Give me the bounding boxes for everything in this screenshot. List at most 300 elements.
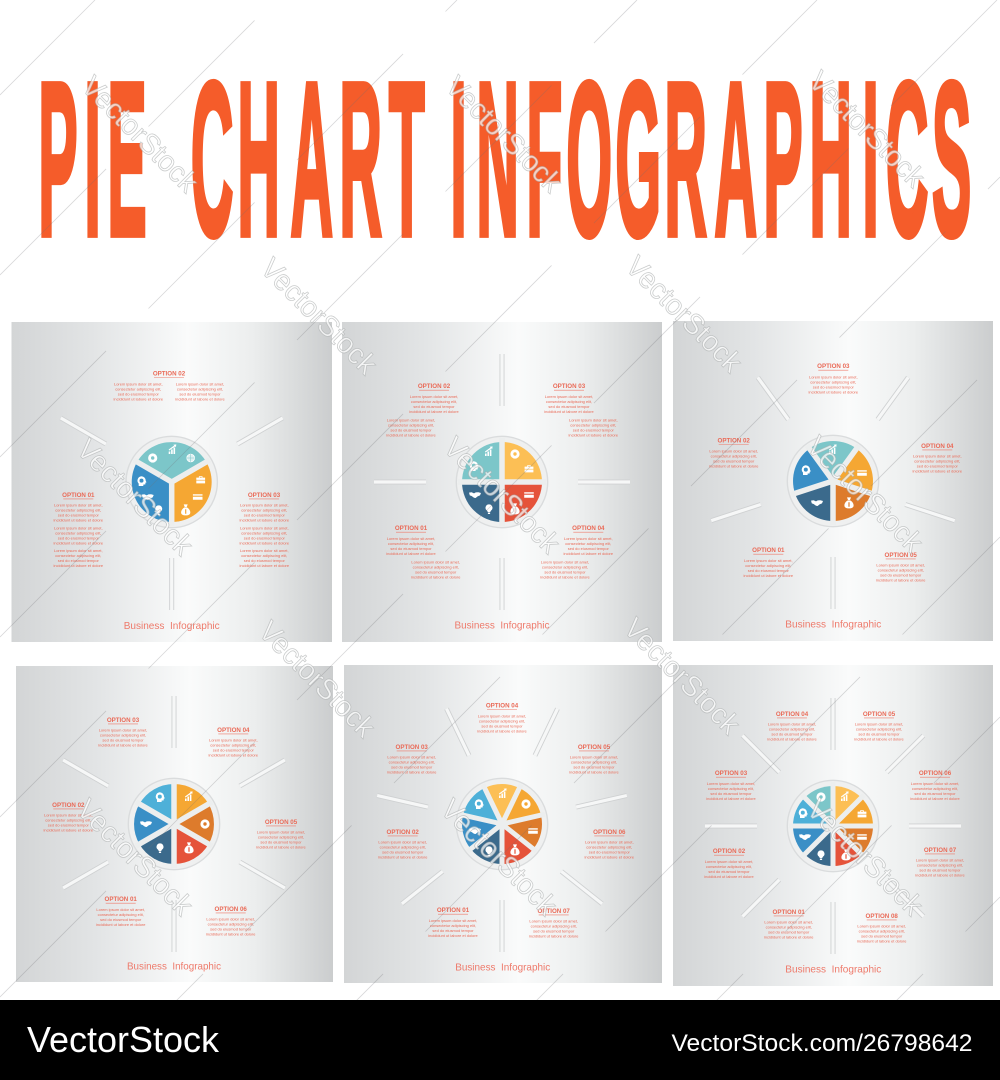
option 05: OPTION 05: [885, 552, 917, 559]
icon: briefcase: [525, 465, 533, 472]
option 06: Lorem ipsum dolor sit amet,: [585, 840, 634, 845]
option 02: Lorem ipsum dolor sit amet,: [44, 813, 93, 818]
option 02: OPTION 02: [718, 438, 750, 444]
option 02: sed do eiusmod tempor: [179, 391, 221, 396]
option 06: OPTION 06: [593, 829, 626, 836]
icon: bulb: [486, 846, 492, 856]
option 06: [206, 906, 256, 937]
option 01: incididunt ut labore et dolore: [386, 551, 437, 556]
caption: Business Infographic: [785, 618, 881, 630]
option 02: Lorem ipsum dolor sit amet,: [705, 859, 753, 864]
icon: head: [802, 465, 811, 475]
option 04: sed do eiusmod tempor: [544, 570, 586, 575]
option 03: OPTION 03: [715, 770, 748, 777]
option 02: consectetur adipiscing elit,: [380, 845, 426, 850]
option 02: incididunt ut labore et dolore: [704, 874, 755, 879]
option 02: sed do eiusmod tempor: [382, 850, 424, 855]
option 01: Lorem ipsum dolor sit amet,: [764, 920, 813, 925]
option 01: OPTION 01: [395, 525, 428, 532]
option 02: sed do eiusmod tempor: [390, 427, 432, 432]
option 02: consectetur adipiscing elit,: [115, 386, 161, 391]
option 01: [428, 907, 479, 938]
option 03: Lorem ipsum dolor sit amet,: [240, 503, 289, 508]
option 03: sed do eiusmod tempor: [244, 558, 286, 563]
option 05: sed do eiusmod tempor: [858, 732, 900, 737]
icon: card: [528, 828, 538, 834]
option 01: [764, 909, 814, 940]
spokes: [711, 377, 955, 609]
option 01: consectetur adipiscing elit,: [388, 541, 434, 546]
option 06: consectetur adipiscing elit,: [586, 845, 632, 850]
option 04: OPTION 04: [486, 702, 519, 710]
option 08: Lorem ipsum dolor sit amet,: [857, 924, 906, 929]
option 05: Lorem ipsum dolor sit amet,: [876, 563, 925, 568]
option 05: [256, 819, 307, 850]
option 01: consectetur adipiscing elit,: [766, 925, 812, 930]
option 03: incididunt ut labore et dolore: [98, 743, 149, 748]
option 03: sed do eiusmod tempor: [548, 404, 590, 409]
option 04: OPTION 04: [776, 711, 809, 718]
option 06: [910, 770, 961, 801]
option 03: consectetur adipiscing elit,: [241, 530, 287, 535]
option 03: Lorem ipsum dolor sit amet,: [707, 781, 755, 786]
option 03: OPTION 03: [817, 363, 850, 370]
option 02: OPTION 02: [713, 848, 746, 855]
option 03: consectetur adipiscing elit,: [389, 759, 435, 764]
option 04: consectetur adipiscing elit,: [542, 565, 588, 570]
watermarks: [70, 65, 931, 922]
caption: Business Infographic: [785, 964, 881, 976]
option 01: incididunt ut labore et dolore: [54, 563, 104, 568]
icon: gear: [200, 819, 210, 829]
watermarks: VectorStock: [439, 70, 568, 199]
footer url: VectorStock.com/26798642: [672, 1030, 972, 1057]
option 08: consectetur adipiscing elit,: [859, 929, 905, 934]
panel: six-segment pie: [16, 666, 333, 982]
pie chart: [456, 436, 548, 528]
option 03: sed do eiusmod tempor: [573, 427, 615, 432]
watermarks: VectorStock: [619, 250, 748, 379]
icon: bulb: [157, 843, 163, 853]
panel: four-segment pie: [342, 322, 662, 642]
option 07: Lorem ipsum dolor sit amet,: [916, 858, 964, 863]
option 03: consectetur adipiscing elit,: [708, 786, 754, 791]
option 03: consectetur adipiscing elit,: [241, 553, 287, 558]
option 04: OPTION 04: [921, 443, 954, 450]
option 01: incididunt ut labore et dolore: [411, 575, 461, 580]
option 07: OPTION 07: [924, 847, 957, 854]
option 03: incididunt ut labore et dolore: [544, 409, 595, 414]
option 07: sed do eiusmod tempor: [533, 929, 575, 934]
option 02: OPTION 02: [52, 802, 85, 809]
option 06: sed do eiusmod tempor: [210, 927, 252, 932]
option 01: Lorem ipsum dolor sit amet,: [411, 560, 460, 565]
option 04: [913, 443, 963, 474]
watermarks: VectorStock: [802, 65, 931, 194]
option 05: Lorem ipsum dolor sit amet,: [570, 754, 618, 759]
icon: handshake: [799, 834, 811, 840]
option 04: Lorem ipsum dolor sit amet,: [913, 454, 962, 459]
option 04: incididunt ut labore et dolore: [209, 753, 259, 758]
icon: gear: [510, 449, 520, 459]
panel: five-segment pie: [673, 321, 993, 641]
option 07: Lorem ipsum dolor sit amet,: [529, 919, 578, 924]
option 02: [704, 848, 755, 879]
icon: money bag: [844, 497, 854, 508]
option 01: Lorem ipsum dolor sit amet,: [387, 536, 435, 541]
option 01: Lorem ipsum dolor sit amet,: [429, 918, 477, 923]
option 01: Lorem ipsum dolor sit amet,: [744, 558, 793, 563]
icon: money bag: [181, 504, 190, 515]
option 02: [114, 370, 226, 401]
option 01: Lorem ipsum dolor sit amet,: [54, 525, 103, 530]
option 05: OPTION 05: [578, 744, 611, 751]
option 01: OPTION 01: [437, 907, 470, 914]
option 03: sed do eiusmod tempor: [710, 791, 752, 796]
icon: gear: [148, 453, 157, 463]
option 01: consectetur adipiscing elit,: [745, 563, 791, 568]
icon: head: [137, 476, 146, 486]
watermarks: VectorStock: [75, 70, 204, 199]
icon: head: [475, 799, 484, 809]
option 04: Lorem ipsum dolor sit amet,: [478, 713, 526, 718]
icon: card: [524, 492, 534, 498]
option 03: incididunt ut labore et dolore: [387, 769, 437, 774]
option 04: sed do eiusmod tempor: [568, 546, 610, 551]
option 07: incididunt ut labore et dolore: [529, 934, 579, 939]
option 06: OPTION 06: [215, 906, 247, 913]
option 03: [544, 383, 619, 437]
icon: card: [857, 470, 867, 476]
option 05: Lorem ipsum dolor sit amet,: [855, 722, 903, 727]
option 03: OPTION 03: [396, 744, 428, 751]
option 07: incididunt ut labore et dolore: [915, 873, 966, 878]
option 02: [44, 802, 94, 833]
watermarks: VectorStock: [800, 430, 929, 559]
option 04: sed do eiusmod tempor: [213, 748, 255, 753]
option 05: incididunt ut labore et dolore: [569, 769, 620, 774]
option 04: OPTION 04: [572, 525, 605, 532]
icon: bulb: [818, 850, 824, 860]
icon: briefcase: [196, 476, 205, 483]
option 01: [386, 525, 461, 580]
icon: handshake: [469, 492, 481, 498]
option 02: incididunt ut labore et dolore: [709, 464, 759, 469]
option 03: incididunt ut labore et dolore: [569, 432, 619, 437]
option 01: OPTION 01: [773, 909, 805, 916]
option 08: [857, 913, 907, 944]
option 06: Lorem ipsum dolor sit amet,: [911, 781, 959, 786]
option 02: consectetur adipiscing elit,: [388, 422, 434, 427]
option 05: [569, 744, 620, 774]
option 02: OPTION 02: [418, 383, 451, 390]
icon: handshake: [142, 494, 154, 500]
option 02: OPTION 02: [387, 829, 419, 836]
option 02: Lorem ipsum dolor sit amet,: [114, 381, 163, 386]
option 04: incididunt ut labore et dolore: [564, 551, 614, 556]
option 01: incididunt ut labore et dolore: [54, 540, 104, 545]
option 03: Lorem ipsum dolor sit amet,: [809, 374, 858, 379]
option 01: [54, 492, 104, 568]
option 03: [98, 717, 149, 748]
option 05: OPTION 05: [265, 819, 298, 826]
icon: chart: [485, 446, 493, 456]
caption: Business Infographic: [455, 962, 550, 974]
option 06: incididunt ut labore et dolore: [585, 855, 635, 860]
option 02: incididunt ut labore et dolore: [175, 396, 226, 401]
option 02: [709, 438, 759, 469]
option 04: incididunt ut labore et dolore: [913, 469, 963, 474]
option 02: incididunt ut labore et dolore: [386, 432, 437, 437]
option 04: consectetur adipiscing elit,: [479, 718, 525, 723]
option 08: sed do eiusmod tempor: [861, 934, 903, 939]
option 01: consectetur adipiscing elit,: [55, 508, 101, 513]
option 06: OPTION 06: [919, 770, 952, 777]
icon: head: [470, 461, 479, 471]
watermarks: VectorStock: [617, 612, 746, 741]
option 03: OPTION 03: [553, 383, 586, 390]
option 06: [585, 829, 635, 860]
caption: Business Infographic: [127, 960, 221, 972]
option 07: consectetur adipiscing elit,: [531, 924, 577, 929]
option 02: consectetur adipiscing elit,: [45, 818, 91, 823]
option 04: consectetur adipiscing elit,: [914, 459, 960, 464]
option 01: OPTION 01: [105, 896, 137, 903]
icon: bulb: [155, 505, 162, 515]
option 02: consectetur adipiscing elit,: [411, 399, 457, 404]
option 01: Lorem ipsum dolor sit amet,: [54, 548, 103, 553]
pie chart: [787, 435, 879, 527]
option 02: Lorem ipsum dolor sit amet,: [378, 840, 427, 845]
option 04: sed do eiusmod tempor: [771, 732, 813, 737]
option 02: consectetur adipiscing elit,: [711, 454, 757, 459]
option 05: consectetur adipiscing elit,: [258, 835, 304, 840]
panel: seven-segment pie: [344, 665, 662, 983]
option 04: Lorem ipsum dolor sit amet,: [209, 738, 258, 743]
option 05: incididunt ut labore et dolore: [256, 845, 307, 850]
option 06: incididunt ut labore et dolore: [910, 796, 961, 801]
option 02: [386, 383, 460, 437]
option 01: [744, 547, 794, 578]
option 02: incididunt ut labore et dolore: [409, 409, 460, 414]
option 05: consectetur adipiscing elit,: [571, 759, 617, 764]
option 04: [540, 525, 614, 580]
footer logo: VectorStock: [27, 1019, 220, 1060]
option 04: consectetur adipiscing elit,: [210, 743, 256, 748]
pie chart: [456, 778, 548, 870]
icon: card: [857, 834, 867, 840]
spokes: [705, 698, 961, 954]
option 03: sed do eiusmod tempor: [244, 513, 286, 518]
icon: head: [156, 792, 165, 802]
option 07: consectetur adipiscing elit,: [917, 863, 963, 868]
option 05: OPTION 05: [863, 711, 896, 718]
option 04: incididunt ut labore et dolore: [540, 575, 591, 580]
option 02: sed do eiusmod tempor: [118, 391, 160, 396]
option 03: Lorem ipsum dolor sit amet,: [240, 548, 289, 553]
option 01: consectetur adipiscing elit,: [430, 923, 476, 928]
option 04: [767, 711, 818, 742]
panel: eight-segment pie: [673, 665, 993, 986]
option 03: [387, 744, 437, 774]
option 03: Lorem ipsum dolor sit amet,: [387, 754, 436, 759]
icon: chart: [169, 444, 176, 454]
option 01: sed do eiusmod tempor: [390, 546, 432, 551]
option 01: incididunt ut labore et dolore: [764, 935, 814, 940]
option 04: Lorem ipsum dolor sit amet,: [564, 536, 613, 541]
option 04: incididunt ut labore et dolore: [477, 728, 528, 733]
option 02: [378, 829, 428, 860]
option 03: [240, 492, 290, 568]
option 07: OPTION 07: [538, 908, 570, 915]
option 07: [529, 908, 579, 939]
option 02: sed do eiusmod tempor: [413, 404, 455, 409]
option 03: Lorem ipsum dolor sit amet,: [545, 394, 593, 399]
spokes: [377, 709, 627, 952]
option 03: incididunt ut labore et dolore: [240, 540, 290, 545]
option 03: Lorem ipsum dolor sit amet,: [569, 417, 618, 422]
icon: briefcase: [858, 810, 866, 817]
title word: PIE: PIE: [38, 37, 147, 281]
spokes: [61, 418, 283, 610]
option 04: Lorem ipsum dolor sit amet,: [541, 560, 589, 565]
option 03: consectetur adipiscing elit,: [570, 422, 616, 427]
option 03: consectetur adipiscing elit,: [546, 399, 592, 404]
option 06: Lorem ipsum dolor sit amet,: [206, 917, 255, 922]
icon: handshake: [811, 500, 823, 506]
option 01: OPTION 01: [62, 492, 95, 499]
option 04: Lorem ipsum dolor sit amet,: [768, 722, 816, 727]
option 05: sed do eiusmod tempor: [260, 840, 302, 845]
option 01: sed do eiusmod tempor: [100, 917, 142, 922]
option 01: consectetur adipiscing elit,: [98, 912, 144, 917]
title word: INFOGRAPHICS: INFOGRAPHICS: [450, 37, 971, 281]
icon: globe: [187, 454, 195, 462]
icon: head: [799, 808, 808, 818]
watermarks: VectorStock: [70, 793, 199, 922]
option 01: incididunt ut labore et dolore: [54, 518, 104, 523]
option 02: sed do eiusmod tempor: [48, 823, 90, 828]
option 07: sed do eiusmod tempor: [919, 868, 961, 873]
option 01: sed do eiusmod tempor: [58, 558, 100, 563]
pie chart: [787, 780, 879, 872]
icon: handshake: [469, 828, 481, 834]
spokes: [374, 354, 630, 610]
option 04: sed do eiusmod tempor: [481, 723, 523, 728]
option 05: incididunt ut labore et dolore: [876, 578, 926, 583]
option 05: [876, 552, 926, 583]
icon: gear: [521, 799, 531, 809]
option 03: sed do eiusmod tempor: [813, 384, 855, 389]
icon: money bag: [184, 842, 194, 853]
pie chart: [128, 778, 220, 870]
option 02: incididunt ut labore et dolore: [44, 828, 94, 833]
option 02: sed do eiusmod tempor: [713, 459, 755, 464]
option 02: consectetur adipiscing elit,: [177, 386, 223, 391]
option 03: Lorem ipsum dolor sit amet,: [99, 728, 147, 733]
option 02: Lorem ipsum dolor sit amet,: [387, 417, 435, 422]
icon: card: [193, 494, 202, 500]
option 01: [96, 896, 146, 927]
watermarks: VectorStock: [434, 793, 563, 922]
option 03: OPTION 03: [107, 717, 140, 724]
option 03: incididunt ut labore et dolore: [809, 389, 859, 394]
option 06: incididunt ut labore et dolore: [206, 932, 256, 937]
option 01: incididunt ut labore et dolore: [744, 573, 794, 578]
panel: three-segment pie: [12, 322, 332, 642]
title: [38, 37, 971, 281]
option 01: OPTION 01: [752, 547, 785, 554]
option 04: consectetur adipiscing elit,: [769, 727, 815, 732]
option 04: consectetur adipiscing elit,: [565, 541, 611, 546]
icon: money bag: [841, 849, 851, 860]
caption: Business Infographic: [454, 620, 550, 632]
icon: gear: [816, 792, 826, 802]
icon: bulb: [486, 504, 492, 514]
option 05: consectetur adipiscing elit,: [878, 568, 924, 573]
option 03: incididunt ut labore et dolore: [240, 518, 290, 523]
caption: Business Infographic: [124, 620, 220, 632]
footer bar: [0, 1000, 1000, 1080]
option 03: Lorem ipsum dolor sit amet,: [240, 525, 289, 530]
option 02: Lorem ipsum dolor sit amet,: [709, 449, 758, 454]
icon: handshake: [140, 821, 152, 827]
option 08: incididunt ut labore et dolore: [857, 939, 907, 944]
option 04: [477, 702, 528, 733]
option 01: consectetur adipiscing elit,: [413, 565, 459, 570]
option 04: OPTION 04: [217, 727, 250, 734]
option 06: consectetur adipiscing elit,: [912, 786, 958, 791]
option 01: Lorem ipsum dolor sit amet,: [54, 503, 103, 508]
option 03: consectetur adipiscing elit,: [810, 379, 856, 384]
option 05: Lorem ipsum dolor sit amet,: [257, 830, 305, 835]
option 02: consectetur adipiscing elit,: [706, 864, 752, 869]
option 01: Lorem ipsum dolor sit amet,: [96, 907, 145, 912]
option 03: consectetur adipiscing elit,: [100, 733, 146, 738]
option 03: OPTION 03: [248, 492, 281, 499]
option 03: [809, 363, 859, 394]
option 04: sed do eiusmod tempor: [917, 464, 959, 469]
option 01: incididunt ut labore et dolore: [428, 933, 479, 938]
pie chart: [126, 436, 217, 528]
option 03: sed do eiusmod tempor: [391, 764, 433, 769]
icon: money bag: [510, 503, 520, 514]
watermarks: VectorStock: [252, 615, 381, 744]
option 02: incididunt ut labore et dolore: [378, 855, 428, 860]
option 05: consectetur adipiscing elit,: [856, 727, 902, 732]
option 01: consectetur adipiscing elit,: [55, 530, 101, 535]
option 02: Lorem ipsum dolor sit amet,: [176, 381, 224, 386]
watermarks: VectorStock: [254, 252, 383, 381]
option 07: [915, 847, 966, 878]
option 03: [706, 770, 757, 801]
watermarks: VectorStock: [437, 431, 566, 560]
option 01: sed do eiusmod tempor: [415, 570, 457, 575]
option 08: OPTION 08: [866, 913, 898, 920]
option 06: consectetur adipiscing elit,: [208, 922, 254, 927]
icon: money bag: [510, 844, 520, 855]
icon: chart: [185, 791, 193, 801]
icon: chart: [829, 444, 837, 454]
option 05: [854, 711, 905, 742]
option 02: sed do eiusmod tempor: [708, 869, 750, 874]
option 02: incididunt ut labore et dolore: [114, 396, 164, 401]
option 01: incididunt ut labore et dolore: [96, 922, 146, 927]
spokes: [63, 696, 285, 952]
option 03: sed do eiusmod tempor: [102, 738, 144, 743]
option 01: sed do eiusmod tempor: [58, 535, 100, 540]
icon: chart: [841, 791, 849, 801]
